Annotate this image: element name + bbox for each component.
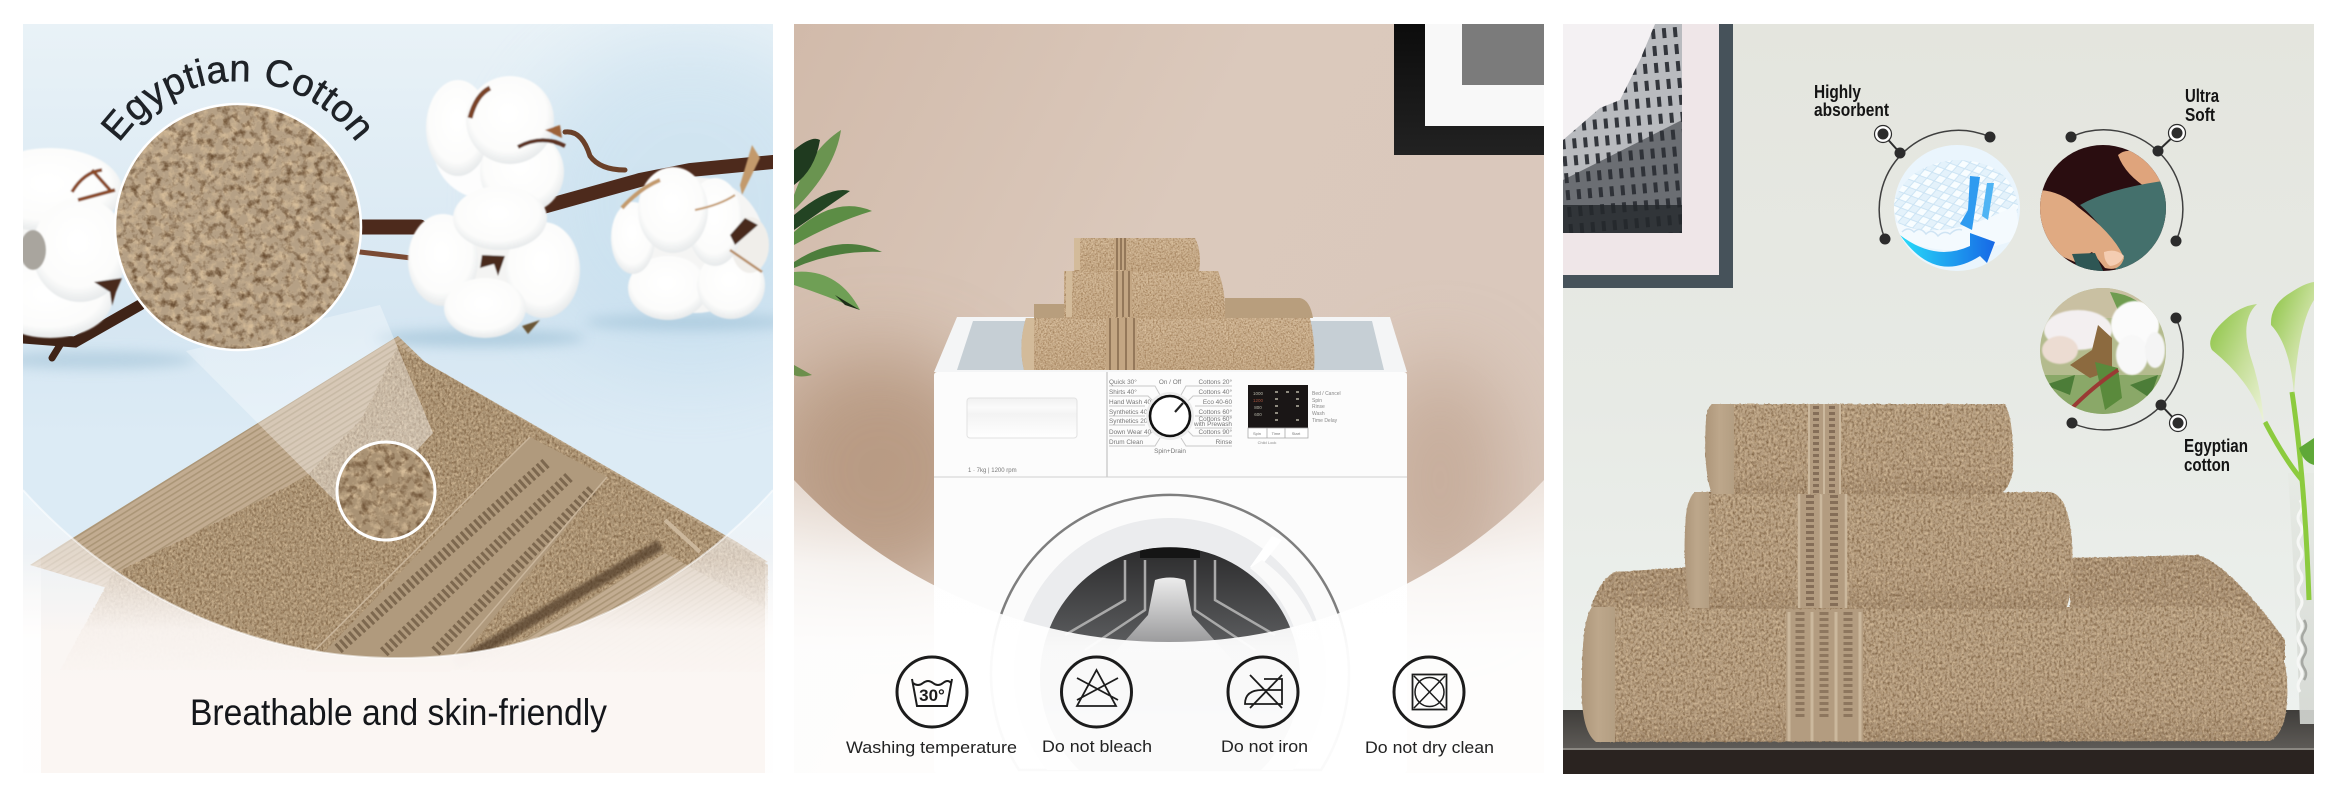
- towel stack: [1582, 404, 2287, 742]
- label: do not iron: Do not iron: [1221, 737, 1308, 756]
- display labels: Wash: [1312, 411, 1325, 417]
- cotton boll: centre: [408, 186, 580, 338]
- label: ultra soft: [2185, 86, 2220, 125]
- digital display: 1000: [1253, 391, 1264, 396]
- icon: do not iron: [1228, 657, 1298, 727]
- bath towel: [1582, 607, 2287, 742]
- towel stack on machine: [1021, 238, 1314, 370]
- digital display: [1248, 385, 1308, 445]
- display labels: Time Delay: [1312, 418, 1338, 424]
- label: washing temperature: Washing temperature: [846, 738, 1017, 757]
- label: egyptian cotton: [2184, 436, 2248, 475]
- cotton boll: left: [23, 148, 123, 339]
- programme labels: Hand Wash 40°: [1109, 398, 1154, 406]
- framed building photo: [1563, 24, 1733, 288]
- label: ultra soft: Ultra: [2185, 86, 2220, 106]
- caption: Breathable and skin-friendly: [190, 692, 607, 733]
- towel close-up: [30, 336, 768, 672]
- programme labels: Synthetics 40°: [1109, 408, 1150, 416]
- display labels: Spin: [1312, 398, 1322, 404]
- programme labels: with Prewash: [1193, 421, 1232, 428]
- plant: [794, 130, 882, 376]
- icon: washing temperature: 30°: [919, 686, 945, 705]
- digital display: 600: [1254, 412, 1262, 417]
- digital display: Time: [1272, 431, 1281, 436]
- callout arc: [1874, 126, 1996, 244]
- photo: cotton plant: [2040, 288, 2166, 415]
- bottom cream curved panel: [23, 490, 773, 773]
- panel: washing machine care: [760, 24, 1544, 773]
- programme labels: Quick 30°: [1109, 378, 1137, 386]
- machine door: [996, 494, 1345, 642]
- magnifier wedge: [186, 305, 433, 519]
- digital display: Spin: [1253, 431, 1261, 436]
- programme labels: Cottons 60°: [1199, 408, 1232, 416]
- label: do not dry clean: Do not dry clean: [1365, 738, 1494, 757]
- small zoom circle: [337, 442, 435, 540]
- digital display: Child Lock: [1258, 440, 1276, 445]
- callout arc: [2066, 124, 2186, 246]
- digital display: 800: [1254, 405, 1262, 410]
- feature: ultra soft: [2036, 86, 2220, 275]
- display labels: [1312, 391, 1341, 424]
- panel: Egyptian cotton material: [23, 24, 773, 773]
- display labels: Bed / Cancel: [1312, 391, 1341, 397]
- detergent drawer: [967, 398, 1077, 438]
- icon: washing temperature: [897, 657, 967, 727]
- cotton boll: right: [611, 145, 769, 320]
- hand towel: [1685, 492, 2072, 609]
- photo: hand on towel: [2036, 145, 2170, 275]
- feature: highly absorbent: [1814, 82, 2020, 271]
- cotton boll: top: [426, 76, 565, 214]
- plant and vase: [2210, 282, 2314, 724]
- white curved lower panel: [794, 480, 1544, 773]
- cotton branch: [23, 132, 773, 358]
- capacity label: 1 · 7kg | 1200 rpm: [968, 468, 1017, 474]
- label: ultra soft: Soft: [2185, 105, 2215, 125]
- label: highly absorbent: [1814, 82, 1889, 120]
- label: highly absorbent: Highly: [1814, 82, 1861, 102]
- programme labels: Cottons 40°: [1199, 388, 1232, 396]
- programme labels: Down Wear 40°: [1109, 428, 1154, 436]
- digital display: Start: [1292, 431, 1301, 436]
- programme labels: Drum Clean: [1109, 439, 1144, 446]
- digital display: 1200: [1253, 398, 1264, 403]
- programme labels: Cottons 20°: [1199, 378, 1232, 386]
- programme labels: On / Off: [1159, 379, 1181, 386]
- large zoom circle: [115, 104, 361, 350]
- icon: do not bleach: [1062, 657, 1132, 727]
- programme labels: Rinse: [1216, 439, 1232, 446]
- wash towel: [1705, 404, 2013, 494]
- programme labels: Cottons 90°: [1199, 428, 1232, 436]
- towel woven border: [305, 437, 607, 672]
- programme labels: Synthetics 20°: [1109, 417, 1150, 425]
- programme labels: Eco 40-60: [1203, 399, 1232, 406]
- washing machine: [934, 317, 1407, 642]
- label: do not bleach: Do not bleach: [1042, 737, 1152, 756]
- photo: absorbent layer: [1893, 145, 2020, 271]
- label: egyptian cotton: cotton: [2184, 455, 2230, 475]
- programme labels: Spin+Drain: [1154, 448, 1186, 455]
- programme labels: [1109, 378, 1232, 455]
- panel: towel set features: [1563, 24, 2314, 774]
- callout arc: [2066, 312, 2186, 432]
- bath towel back: [1590, 555, 2285, 660]
- programme labels: Cottons 60°: [1199, 415, 1232, 423]
- label: highly absorbent: absorbent: [1814, 100, 1889, 120]
- label: egyptian cotton: Egyptian: [2184, 436, 2248, 456]
- framed picture: [1394, 24, 1544, 155]
- display labels: Rinse: [1312, 404, 1325, 410]
- programme labels: Shirts 40°: [1109, 388, 1137, 396]
- icon: do not dry clean: [1394, 657, 1464, 727]
- feature: egyptian cotton: [2040, 288, 2248, 475]
- selector dial: [1146, 392, 1194, 440]
- shelf: [1563, 710, 2314, 774]
- curved heading: Egyptian Cotton: [100, 58, 370, 141]
